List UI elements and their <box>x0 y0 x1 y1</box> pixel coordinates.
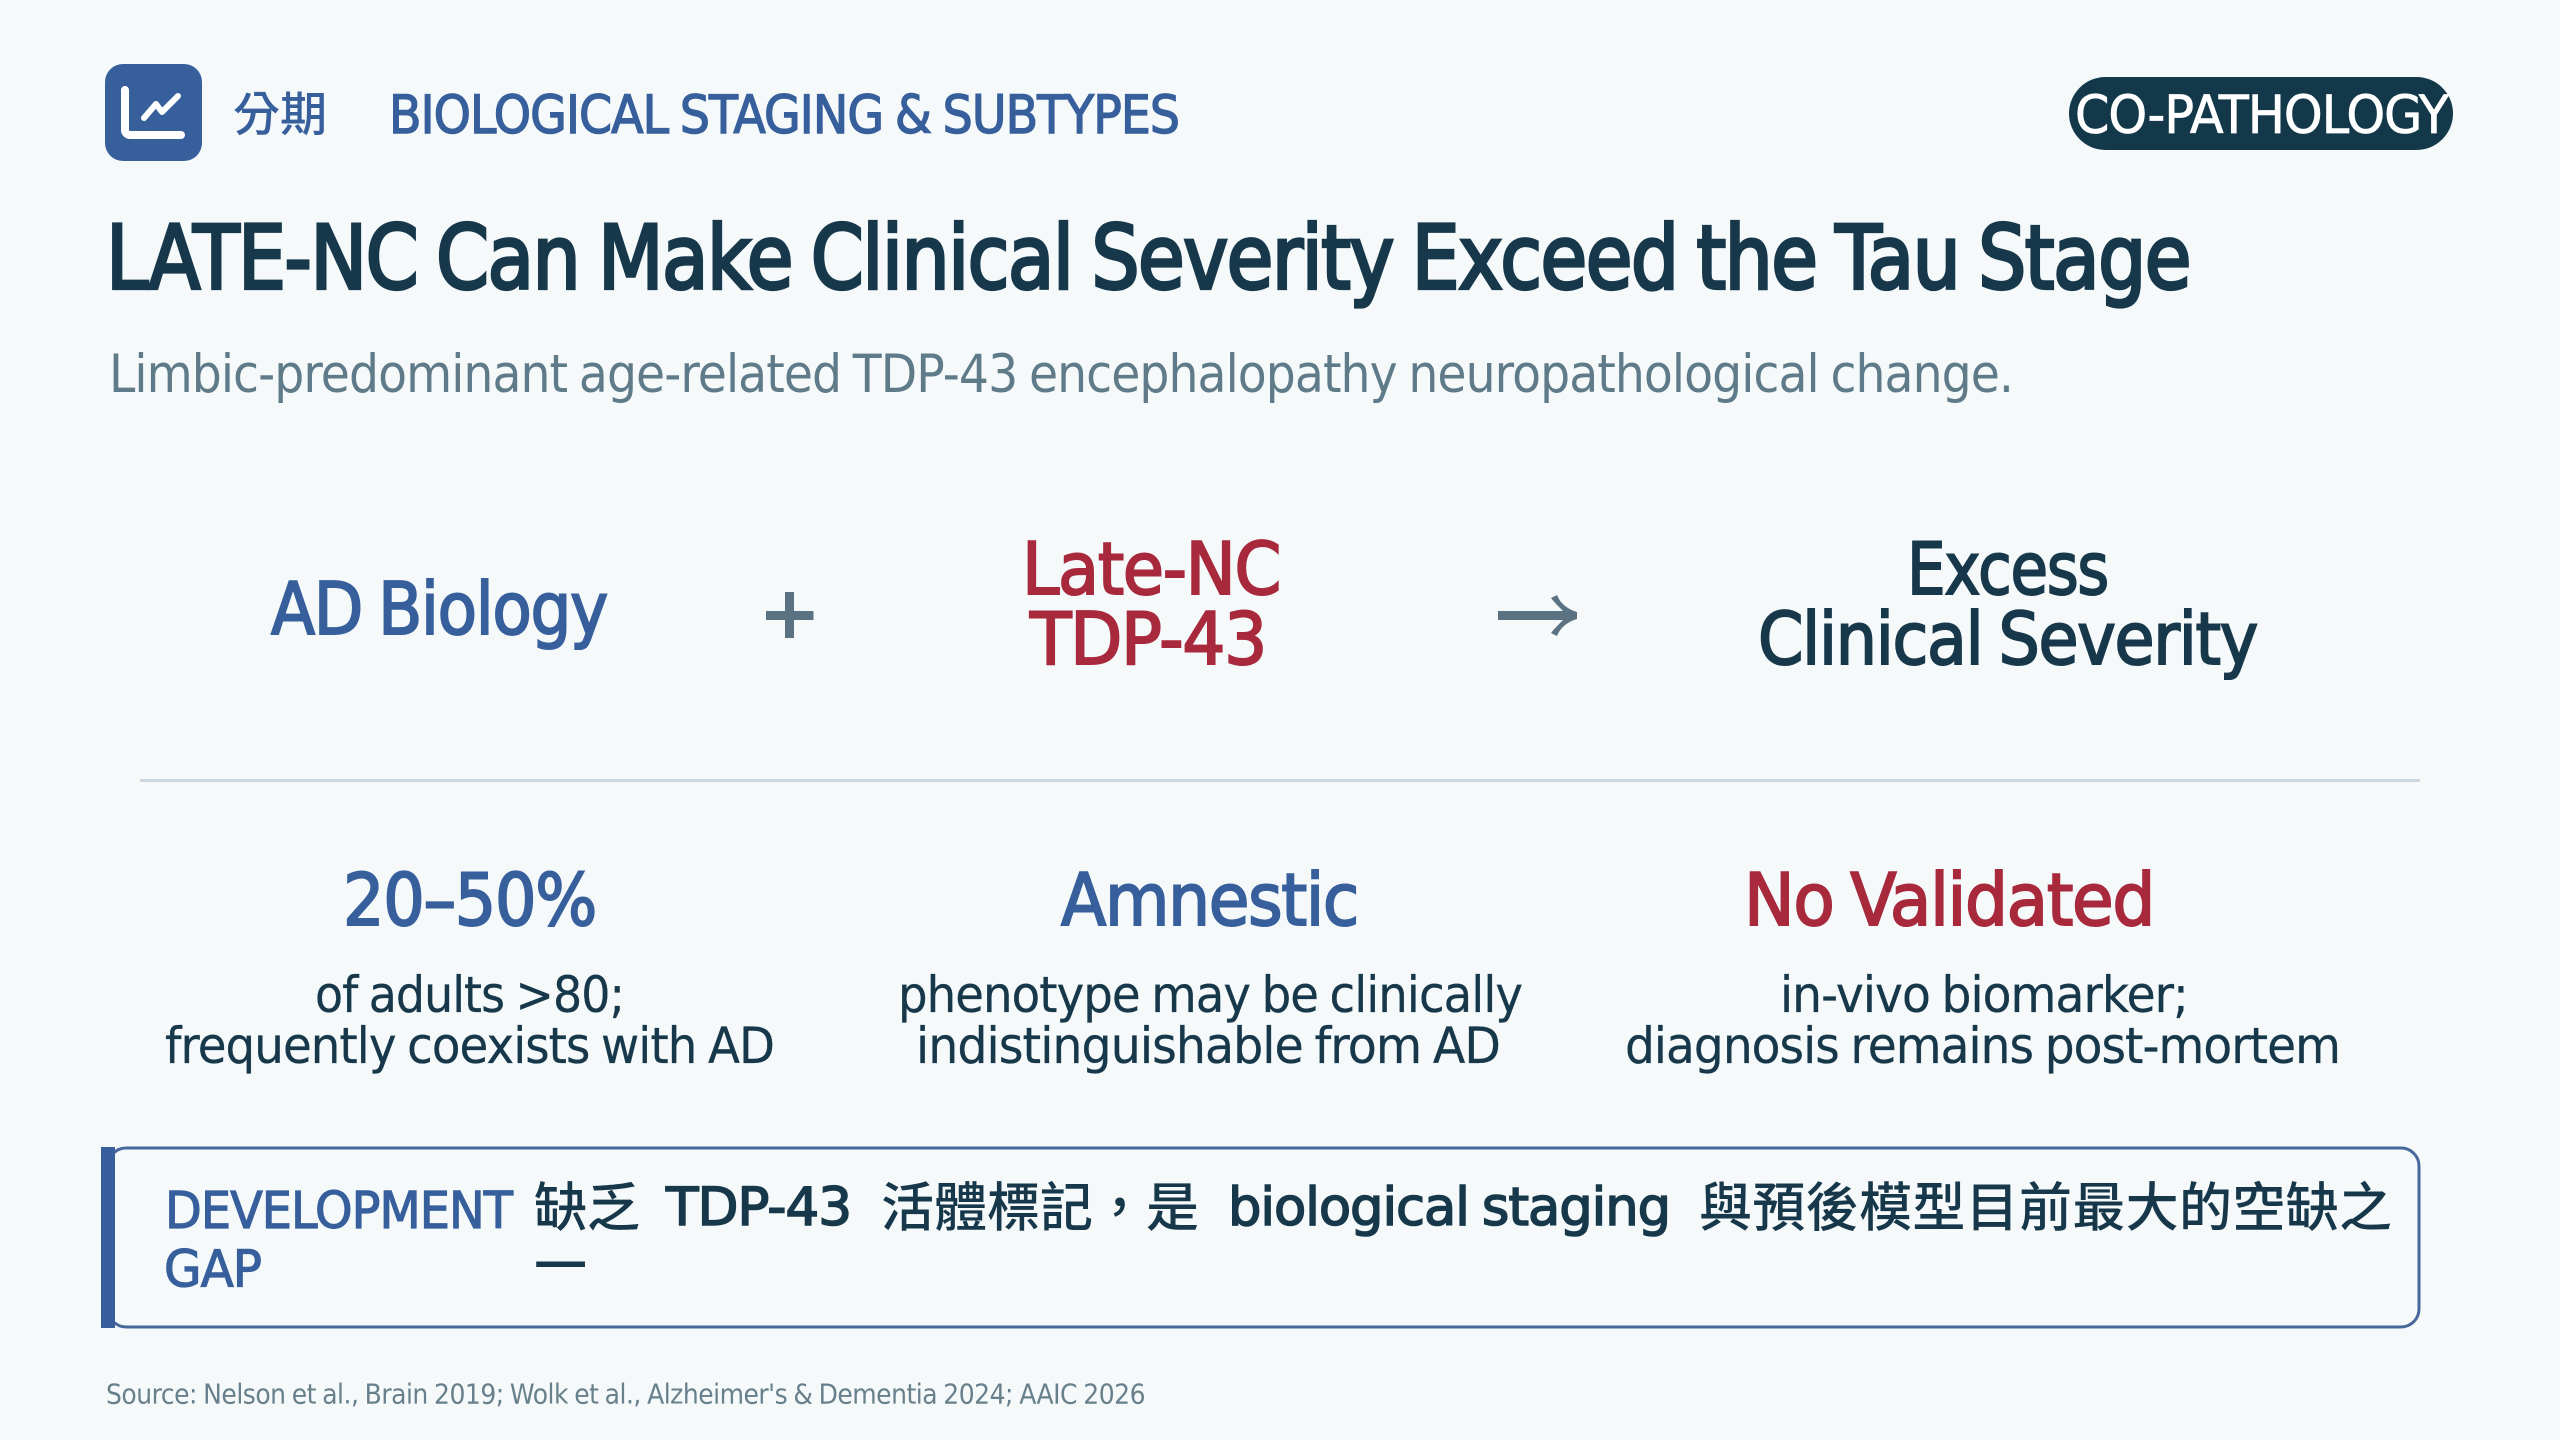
stat: amnestic <box>898 858 1522 1075</box>
equation: Late-NC TDP-43: Late-NC <box>1022 527 1280 611</box>
equation: AD biology: AD Biology <box>271 567 607 651</box>
equation: Late-NC TDP-43 <box>1022 527 1280 681</box>
callout: development gap: 與預後模型目前最大的空缺之 <box>1699 1166 2392 1242</box>
stat: amnestic: Amnestic <box>1061 858 1358 942</box>
subtitle: Limbic-predominant age-related TDP-43 encephalopathy neuropathological change. <box>109 344 2013 405</box>
stat: no validated: in-vivo biomarker; <box>1780 966 2188 1024</box>
divider <box>140 779 2420 782</box>
arrow <box>1498 595 1577 636</box>
source: Source: Nelson et al., Brain 2019; Wolk et al., Alzheimer's & Dementia 2024; AAIC 2026 <box>106 1378 1145 1410</box>
stat: 20-50%: of adults >80; <box>315 966 624 1024</box>
tag: co-pathology: CO-PATHOLOGY <box>2075 85 2450 146</box>
callout: development gap <box>101 1147 2419 1328</box>
stat: amnestic: phenotype may be clinically <box>898 966 1522 1024</box>
section label: English: BIOLOGICAL STAGING & SUBTYPES <box>389 85 1179 146</box>
section label: Chinese: 分期 <box>233 76 327 145</box>
title: LATE-NC Can Make Clinical Severity Exceed the Tau Stage <box>106 206 2190 310</box>
icon: line chart badge <box>105 64 202 161</box>
callout: development gap: 活體標記，是 <box>881 1166 1199 1242</box>
stat: amnestic: indistinguishable from AD <box>916 1017 1500 1075</box>
equation: excess clinical severity <box>1758 527 2257 681</box>
stat: 20-50%: 20–50% <box>343 858 596 942</box>
stat: no validated <box>1625 858 2340 1075</box>
stat: no validated: No Validated <box>1744 858 2154 942</box>
callout: development gap: TDP-43 <box>665 1177 851 1238</box>
callout: development gap: biological staging <box>1228 1177 1670 1238</box>
stat: 20-50%: frequently coexists with AD <box>165 1017 774 1075</box>
callout: development gap: 缺乏 <box>534 1166 640 1242</box>
stat: no validated: diagnosis remains post-mortem <box>1625 1017 2340 1075</box>
equation: excess clinical severity: Excess <box>1907 527 2108 611</box>
callout: development gap: DEVELOPMENT <box>165 1182 514 1241</box>
equation: excess clinical severity: Clinical Severity <box>1758 597 2257 681</box>
callout: development gap: 一 <box>534 1225 587 1301</box>
stat: 20-50% <box>165 858 774 1075</box>
equation: Late-NC TDP-43: TDP-43 <box>1029 597 1266 681</box>
callout: development gap: GAP <box>164 1240 261 1300</box>
icon: plus <box>766 592 814 638</box>
